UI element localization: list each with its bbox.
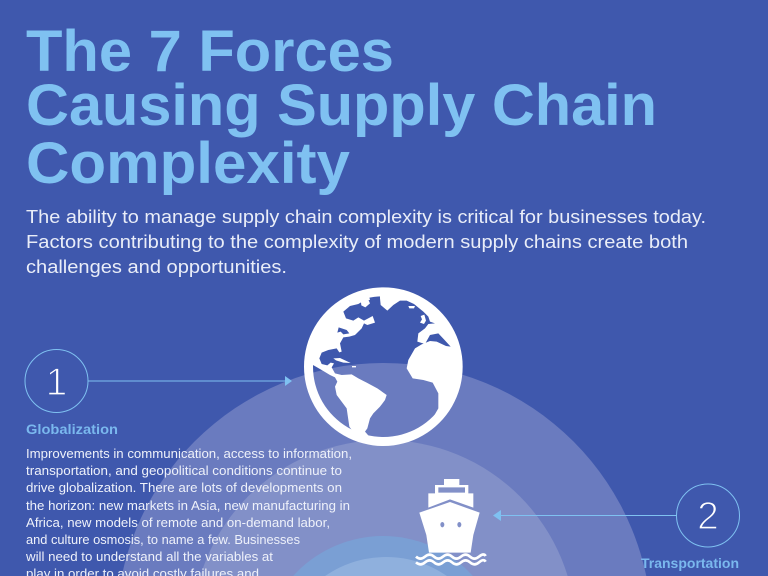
icon: globe	[304, 287, 470, 446]
marker 1: 1	[46, 361, 67, 404]
intro text: Factors contributing to the complexity of modern supply chains create both	[26, 231, 688, 252]
text block: globalization: the horizon: new markets in Asia, new manufacturing in	[26, 499, 350, 513]
title: Causing Supply Chain	[26, 73, 657, 138]
text block: globalization: transportation, and geopolitical conditions continue to	[26, 464, 342, 478]
marker 2: 2	[697, 495, 719, 538]
icon: ship	[416, 479, 486, 564]
marker 2	[676, 484, 740, 547]
intro text: The ability to manage supply chain complexity is critical for businesses today.	[26, 206, 706, 227]
text block: globalization: will need to understand all the variables at	[25, 550, 274, 564]
arrow 2	[493, 510, 677, 521]
heading: globalization: Globalization	[26, 422, 118, 437]
background concentric circles	[116, 363, 652, 576]
text block: globalization: Improvements in communication, access to information,	[26, 447, 352, 461]
title: Complexity	[26, 131, 350, 196]
arrow 1	[88, 376, 292, 386]
intro text: challenges and opportunities.	[26, 256, 287, 277]
intro text	[26, 206, 706, 277]
text block: globalization	[25, 447, 352, 576]
text block: globalization: drive globalization. There are lots of developments on	[26, 481, 342, 495]
text block: globalization: and culture osmosis, to name a few. Businesses	[26, 533, 300, 547]
title: The 7 Forces	[26, 19, 394, 84]
text block: globalization: Africa, new models of remote and on-demand labor,	[26, 516, 330, 530]
title	[26, 19, 657, 196]
heading: transportation: Transportation	[641, 555, 739, 571]
marker 1	[25, 350, 88, 412]
